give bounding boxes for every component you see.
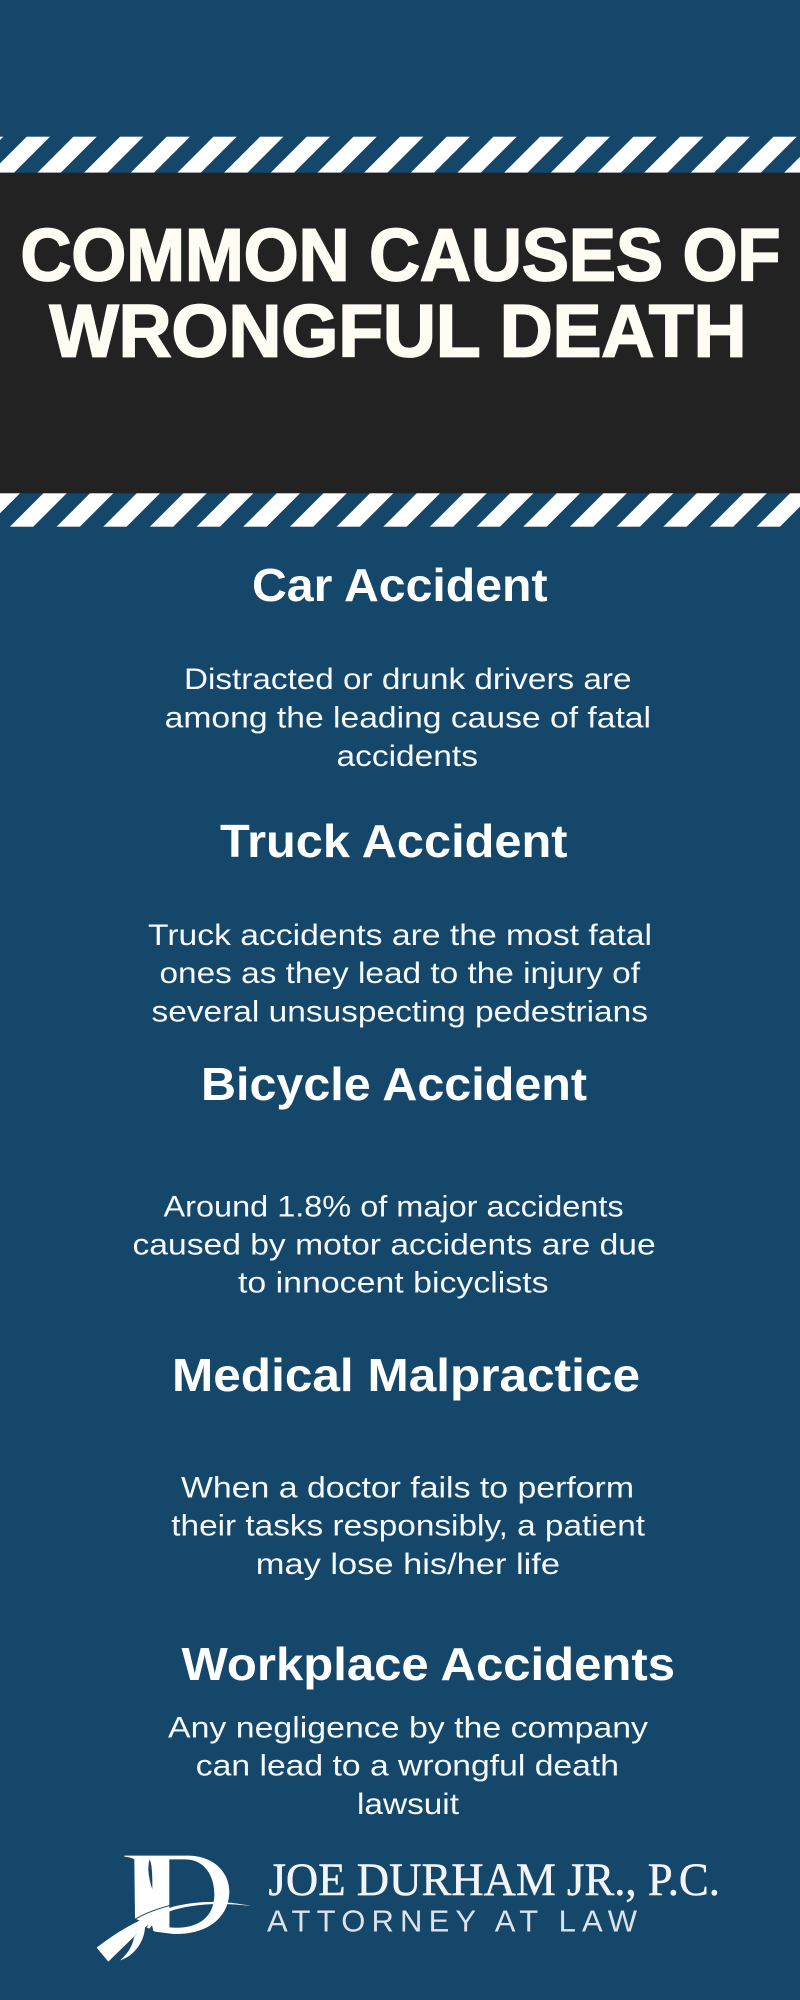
text: bicycle accident description: Around 1.8% of major accidents [164, 1191, 624, 1224]
title panel [0, 173, 800, 493]
top striped band [0, 137, 800, 173]
text: bicycle accident description [132, 1191, 656, 1300]
heading: medical malpractice: Medical Malpractice [172, 1349, 640, 1401]
text: car accident description [165, 663, 651, 773]
text: car accident description: accidents [336, 740, 478, 773]
icon: JD monogram [97, 1856, 251, 1962]
text: car accident description: Distracted or drunk drivers are [184, 663, 632, 696]
text: workplace accidents description: can lead to a wrongful death [196, 1750, 619, 1783]
section: bicycle accident [132, 1058, 656, 1300]
text: medical malpractice description [171, 1472, 646, 1581]
section: workplace accidents [168, 1638, 675, 1821]
heading: car accident: Car Accident [252, 559, 548, 611]
text: medical malpractice description: When a doctor fails to perform [181, 1472, 634, 1505]
text: workplace accidents description: Any negligence by the company [168, 1712, 648, 1745]
text: workplace accidents description [168, 1712, 648, 1821]
text: medical malpractice description: their tasks responsibly, a patient [171, 1510, 646, 1543]
title: COMMON CAUSES OF [20, 214, 780, 296]
section: car accident [165, 559, 651, 773]
title [20, 214, 780, 372]
text: truck accident description [148, 919, 652, 1029]
firm name: JOE DURHAM JR., P.C. [268, 1854, 720, 1906]
text: truck accident description: Truck accidents are the most fatal [148, 919, 652, 952]
text: bicycle accident description: to innocent bicyclists [238, 1267, 549, 1300]
text: bicycle accident description: caused by motor accidents are due [132, 1228, 656, 1261]
section: medical malpractice [171, 1349, 646, 1581]
heading: workplace accidents: Workplace Accidents [182, 1638, 675, 1690]
heading: bicycle accident: Bicycle Accident [201, 1058, 587, 1110]
firm tagline: ATTORNEY AT LAW [267, 1904, 638, 1939]
text: truck accident description: ones as they lead to the injury of [160, 957, 641, 990]
logo [97, 1854, 720, 1962]
section: truck accident [148, 815, 652, 1029]
text: truck accident description: several unsuspecting pedestrians [152, 996, 648, 1029]
text: car accident description: among the leading cause of fatal [165, 702, 651, 735]
text: workplace accidents description: lawsuit [357, 1788, 460, 1821]
bottom striped band [0, 493, 800, 527]
text: medical malpractice description: may lose his/her life [256, 1548, 560, 1581]
heading: truck accident: Truck Accident [220, 815, 568, 867]
title: WRONGFUL DEATH [50, 290, 746, 372]
